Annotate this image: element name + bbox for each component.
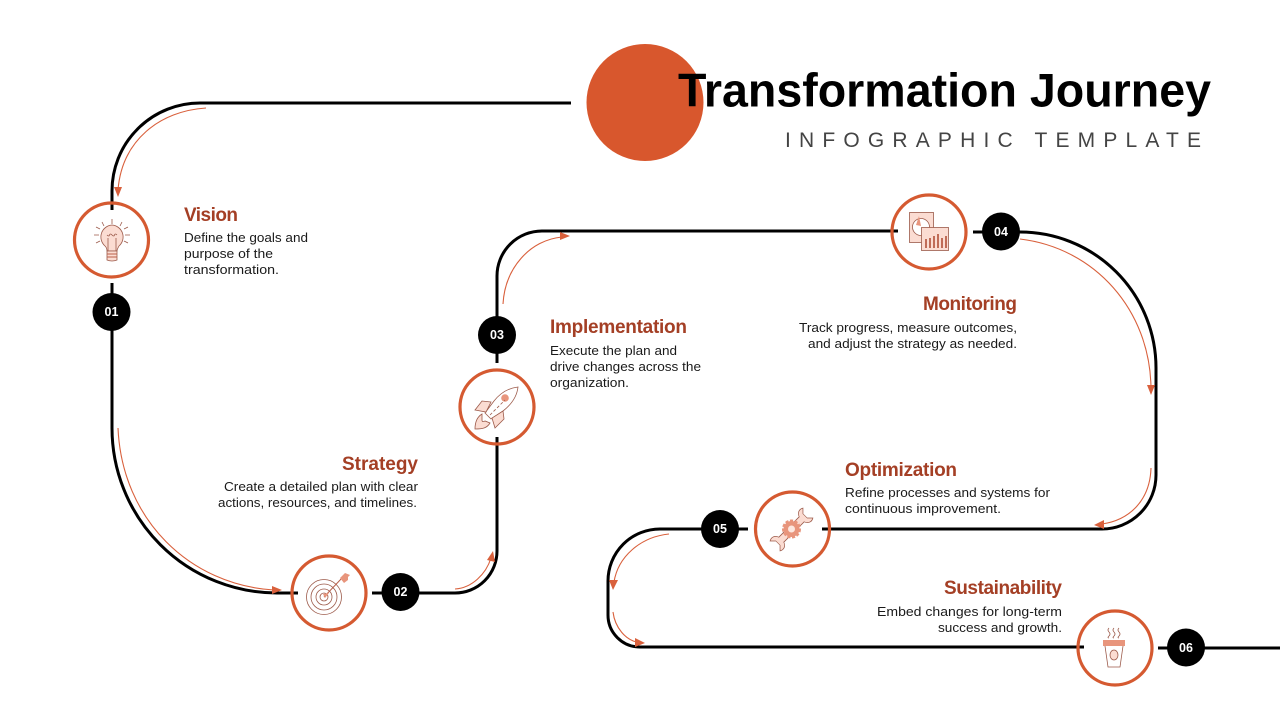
description: organization. [550, 375, 629, 390]
number 05 [701, 510, 739, 548]
heading: Implementation [550, 317, 687, 338]
step 3: implementation [460, 316, 701, 444]
direction arrows [114, 108, 1155, 647]
step 4: monitoring [799, 195, 1020, 351]
description: and adjust the strategy as needed. [808, 336, 1017, 351]
description: Refine processes and systems for [845, 485, 1051, 500]
number 06: 06 [1179, 641, 1193, 655]
step 1: vision [74, 203, 308, 331]
description: Execute the plan and [550, 343, 677, 358]
heading: Sustainability [944, 578, 1062, 599]
description: purpose of the [184, 246, 273, 261]
description: Track progress, measure outcomes, [799, 320, 1017, 335]
description: Define the goals and [184, 230, 308, 245]
number 03: 03 [490, 328, 504, 342]
number 04 [982, 212, 1020, 250]
icon: wrench and gear [756, 492, 830, 566]
icon: charts [892, 195, 966, 269]
subtitle: INFOGRAPHIC TEMPLATE [785, 129, 1201, 152]
description [550, 343, 701, 390]
journey path [112, 103, 1280, 648]
number 02 [382, 573, 420, 611]
number 01: 01 [105, 305, 118, 319]
title: Transformation Journey [678, 64, 1211, 116]
description [799, 320, 1017, 351]
heading: Monitoring [923, 294, 1017, 315]
number 05: 05 [713, 522, 727, 536]
description: success and growth. [938, 620, 1062, 635]
number 03 [478, 316, 516, 354]
icon: target [292, 556, 366, 630]
step 6: sustainability [877, 578, 1205, 685]
accent circle [586, 44, 704, 161]
step 5: optimization [701, 460, 1051, 566]
number 04: 04 [994, 225, 1008, 239]
icon: coffee cup [1078, 611, 1152, 685]
description: Create a detailed plan with clear [224, 479, 419, 494]
description [218, 479, 419, 510]
heading: Optimization [845, 460, 957, 481]
number 06 [1167, 628, 1205, 666]
description: continuous improvement. [845, 501, 1001, 516]
description [877, 604, 1062, 635]
heading: Vision [184, 205, 238, 226]
icon: rocket [460, 370, 534, 444]
number 02: 02 [394, 585, 407, 599]
description: transformation. [184, 262, 279, 277]
description: Embed changes for long-term [877, 604, 1062, 619]
description [845, 485, 1051, 516]
step 2: strategy [218, 454, 420, 630]
description [184, 230, 308, 277]
description: actions, resources, and timelines. [218, 495, 417, 510]
icon: light bulb [74, 203, 148, 277]
number 01 [92, 293, 130, 331]
description: drive changes across the [550, 359, 701, 374]
heading: Strategy [342, 454, 418, 475]
